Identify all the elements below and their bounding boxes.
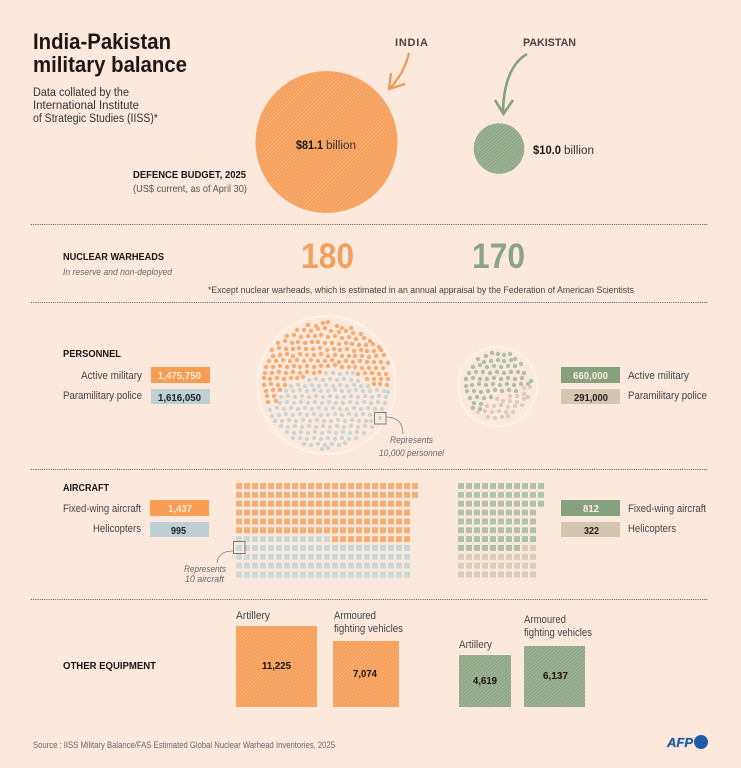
aircraft waffle pakistan [458,483,546,580]
india armoured vehicles square [333,610,403,707]
india artillery square [236,610,317,707]
title: military balance [33,52,187,77]
callout: represents 10,000 personnel: 10,000 personnel [379,448,445,459]
india label: INDIA [395,37,428,49]
personnel legend pakistan: 660,000 [573,370,608,382]
aircraft legend india: 995 [171,525,186,537]
personnel dots pakistan [458,347,537,426]
pakistan armoured vehicles square: Armoured [524,614,566,626]
aircraft waffle india [236,483,420,580]
personnel legend pakistan [561,367,707,404]
india armoured vehicles square: fighting vehicles [334,623,403,635]
pakistan budget circle: billion [564,145,594,157]
pakistan budget circle: $10.0 [533,145,561,157]
aircraft legend india: 1,437 [168,503,192,515]
pakistan artillery square [459,639,511,707]
pakistan armoured vehicles square: fighting vehicles [524,627,592,639]
arrow: pakistan [495,54,527,114]
india armoured vehicles square: Armoured [334,610,376,622]
personnel legend india [63,367,210,404]
aircraft legend india: Fixed-wing aircraft [63,503,141,515]
callout: represents 10 aircraft: 10 aircraft [185,574,224,585]
personnel legend india: Paramilitary police [63,390,142,402]
pakistan budget circle [474,123,594,174]
personnel legend pakistan: Active military [628,370,689,382]
subtitle [33,87,158,125]
title [33,29,187,77]
personnel legend pakistan: Paramilitary police [628,390,707,402]
subtitle: Data collated by the [33,87,129,99]
india artillery square: 11,225 [262,660,291,672]
aircraft legend pakistan: 812 [583,503,599,515]
aircraft heading: AIRCRAFT [63,482,109,494]
personnel legend india: 1,616,050 [158,392,201,404]
callout: represents 10,000 personnel: Represents [390,435,433,446]
other equipment heading: OTHER EQUIPMENT [63,660,157,672]
title: India-Pakistan [33,29,171,54]
india artillery square: Artillery [236,610,270,622]
india budget circle: $81.1 [296,140,324,152]
pakistan warheads number: 170 [472,237,525,276]
logo: AFP: AFP [666,735,693,750]
pakistan artillery square: 4,619 [473,675,497,687]
nuclear warheads heading [63,251,173,278]
pakistan armoured vehicles square [524,614,592,707]
arrow: india [389,53,409,89]
india budget circle [256,71,398,213]
nuclear warheads heading: NUCLEAR WARHEADS [63,251,164,263]
footnote: *Except nuclear warheads, which is estimated in an annual appraisal by the Federation of American Scientists [208,285,634,296]
logo: AFP [666,735,708,750]
pakistan artillery square: Artillery [459,639,492,651]
aircraft legend pakistan: Fixed-wing aircraft [628,503,706,515]
callout: represents 10,000 personnel [374,412,445,459]
callout: represents 10 aircraft [184,542,245,585]
india budget circle: billion [326,140,356,152]
pakistan armoured vehicles square: 6,137 [543,670,568,682]
personnel legend india: 1,475,750 [158,370,201,382]
india armoured vehicles square: 7,074 [353,668,377,680]
defence budget label: DEFENCE BUDGET, 2025 [133,169,246,181]
aircraft legend india [63,500,209,537]
personnel heading: PERSONNEL [63,348,122,360]
subtitle: of Strategic Studies (IISS)* [33,113,158,125]
personnel legend india: Active military [81,370,142,382]
aircraft legend pakistan [561,500,706,537]
callout: represents 10 aircraft: Represents [184,564,226,575]
nuclear warheads heading: In reserve and non-deployed [63,267,173,278]
defence budget label: (US$ current, as of April 30) [133,184,247,195]
aircraft legend pakistan: Helicopters [628,523,676,535]
subtitle: International Institute [33,100,139,112]
aircraft legend india: Helicopters [93,523,141,535]
pakistan label: PAKISTAN [523,37,576,49]
personnel legend pakistan: 291,000 [574,392,608,404]
source: Source : IISS Military Balance/FAS Estimated Global Nuclear Warhead Inventories, 2025 [33,740,335,750]
india warheads number: 180 [301,237,354,276]
personnel dots india [258,316,396,454]
aircraft legend pakistan: 322 [584,525,599,537]
defence budget label [133,169,247,195]
